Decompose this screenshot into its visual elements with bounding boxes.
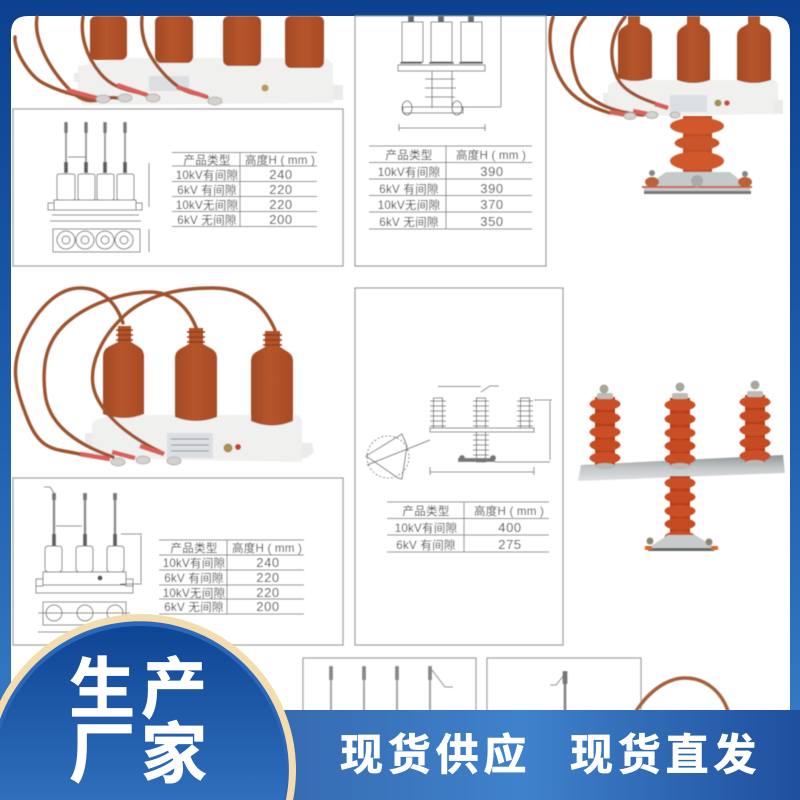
banner text: in-stock direct shipping: 现货直发 xyxy=(570,732,761,780)
badge text: manufacturer xyxy=(69,652,207,791)
table: cross-arm heights: 6kV 有间隙 xyxy=(396,538,456,552)
schematic: cross-arm arrester xyxy=(366,386,552,479)
table: pillar-mounted heights: 6kV 无间隙 xyxy=(379,215,439,229)
badge text: manufacturer: 生 xyxy=(69,652,135,726)
table: four-pole heights: 产品类型 xyxy=(183,153,231,167)
panel: pillar-mounted drawing and table xyxy=(355,16,546,266)
table: pillar-mounted heights: 390 xyxy=(480,164,504,179)
panel: four-pole drawing and table xyxy=(13,109,343,266)
table: four-pole heights xyxy=(172,152,317,227)
table: cross-arm heights: 400 xyxy=(498,520,522,535)
table: pillar-mounted heights: 产品类型 xyxy=(385,148,433,162)
table: pillar-mounted heights: 10kV无间隙 xyxy=(378,198,441,212)
table: pillar-mounted heights: 370 xyxy=(480,197,504,212)
table: pillar-mounted heights: 350 xyxy=(480,214,504,229)
table: three-pole heights: 6kV 有间隙 xyxy=(164,571,224,585)
panel: bottom right drawing xyxy=(487,658,641,738)
table: three-pole heights: 高度H ( mm ) xyxy=(232,541,302,555)
table: four-pole heights: 6kV 无间隙 xyxy=(177,213,237,227)
product photo: bottom right wire xyxy=(636,678,728,711)
product photo: four-pole arrester xyxy=(15,16,343,105)
product photo: pillar-mounted arrester xyxy=(550,16,783,194)
schematic: pillar-mounted arrester xyxy=(398,16,501,131)
table: cross-arm heights xyxy=(387,502,549,552)
table: three-pole heights: 6kV 无间隙 xyxy=(164,600,224,614)
banner text: in-stock supply: 现货供应 xyxy=(340,732,531,780)
table: four-pole heights: 高度H ( mm ) xyxy=(245,153,315,167)
table: pillar-mounted heights xyxy=(369,146,532,229)
table: pillar-mounted heights: 6kV 有间隙 xyxy=(379,182,439,196)
table: pillar-mounted heights: 10kV有间隙 xyxy=(378,165,441,179)
schematic: four-pole arrester xyxy=(48,122,149,252)
table: four-pole heights: 6kV 有间隙 xyxy=(177,183,237,197)
table: three-pole heights: 10kV无间隙 xyxy=(163,586,226,600)
bottom banner xyxy=(250,710,800,800)
table: three-pole heights: 220 xyxy=(256,585,280,600)
table: three-pole heights: 220 xyxy=(256,570,280,585)
table: cross-arm heights: 产品类型 xyxy=(402,504,450,518)
table: cross-arm heights: 10kV有间隙 xyxy=(395,521,458,535)
table: cross-arm heights: 275 xyxy=(498,537,522,552)
table: cross-arm heights: 高度H ( mm ) xyxy=(474,504,544,518)
badge text: manufacturer: 家 xyxy=(141,717,207,791)
product photo: three-pole arrester xyxy=(15,288,314,466)
panel: bottom centre drawing xyxy=(303,658,476,738)
panel: cross-arm drawing and table xyxy=(355,288,563,645)
schematic: three-pole arrester xyxy=(36,487,142,632)
table: four-pole heights: 220 xyxy=(269,197,293,212)
table: four-pole heights: 10kV无间隙 xyxy=(176,198,239,212)
table: pillar-mounted heights: 390 xyxy=(480,181,504,196)
badge text: manufacturer: 产 xyxy=(141,652,207,726)
product photo: cross-arm arrester xyxy=(578,380,785,551)
table: four-pole heights: 200 xyxy=(269,212,293,227)
table: three-pole heights: 10kV有间隙 xyxy=(163,556,226,570)
panel: three-pole drawing and table xyxy=(13,478,343,645)
table: three-pole heights: 200 xyxy=(256,599,280,614)
table: four-pole heights: 240 xyxy=(269,167,293,182)
badge: manufacturer circle xyxy=(0,614,296,800)
badge text: manufacturer: 厂 xyxy=(69,717,135,791)
table: four-pole heights: 220 xyxy=(269,182,293,197)
table: three-pole heights xyxy=(159,540,304,614)
table: four-pole heights: 10kV有间隙 xyxy=(176,168,239,182)
table: three-pole heights: 240 xyxy=(256,555,280,570)
table: pillar-mounted heights: 高度H ( mm ) xyxy=(456,148,526,162)
table: three-pole heights: 产品类型 xyxy=(170,541,218,555)
